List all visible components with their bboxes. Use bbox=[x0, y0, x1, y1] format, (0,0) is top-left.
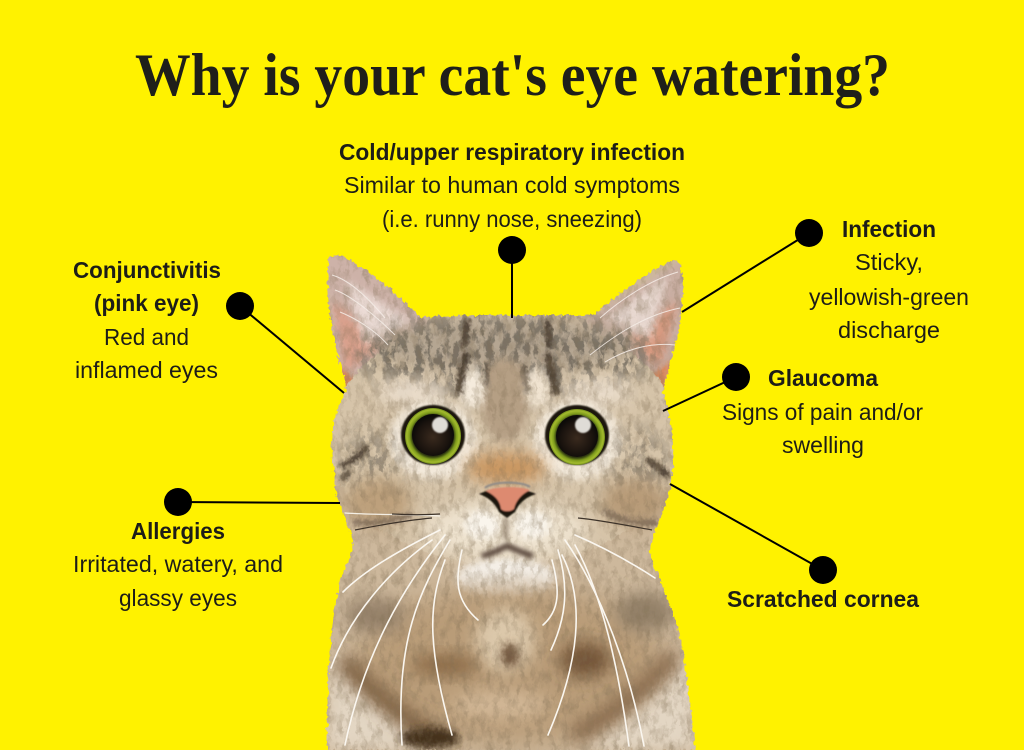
callout line and dot: glaucoma bbox=[663, 363, 750, 411]
callout line and dot: conjunctivitis bbox=[226, 292, 344, 393]
head fur bbox=[329, 313, 681, 597]
text: infection: Sticky, bbox=[855, 249, 923, 275]
callout line and dot: scratched cornea bbox=[670, 484, 837, 584]
text: glaucoma: Glaucoma bbox=[768, 365, 878, 391]
tabby stripes bbox=[342, 322, 668, 523]
text: allergies: Allergies bbox=[131, 518, 225, 544]
text: conjunctivitis: Conjunctivitis bbox=[73, 257, 221, 283]
cat photo illustration bbox=[320, 250, 700, 750]
text: infection: Infection bbox=[842, 216, 936, 242]
text: allergies: Irritated, watery, and bbox=[73, 551, 283, 577]
left eye bbox=[401, 405, 465, 465]
text: cold / upper respiratory infection: Cold/upper respiratory infection bbox=[339, 139, 685, 165]
text: glaucoma: swelling bbox=[782, 432, 864, 458]
text: scratched cornea: Scratched cornea bbox=[727, 586, 919, 612]
nose bbox=[479, 483, 536, 518]
callout line and dot: infection bbox=[682, 219, 823, 312]
text: infection: yellowish-green bbox=[809, 284, 969, 310]
text: glaucoma: Signs of pain and/or bbox=[722, 399, 923, 425]
text: conjunctivitis: inflamed eyes bbox=[75, 357, 218, 383]
ears bbox=[322, 250, 690, 398]
bottom fur backing strip bbox=[330, 725, 692, 750]
muzzle and chin bbox=[423, 500, 587, 560]
text: infection: discharge bbox=[838, 317, 940, 343]
title: Why is your cat's eye watering? bbox=[135, 42, 890, 108]
text: conjunctivitis: (pink eye) bbox=[94, 290, 199, 316]
chest fur bbox=[327, 585, 695, 750]
whiskers bbox=[331, 513, 655, 746]
text: conjunctivitis: Red and bbox=[104, 324, 189, 350]
callout line and dot: cold bbox=[498, 236, 526, 318]
right eye bbox=[545, 405, 609, 465]
text: glaucoma bbox=[722, 365, 923, 458]
text: conjunctivitis bbox=[73, 257, 221, 383]
mouth bbox=[482, 518, 533, 556]
text: cold / upper respiratory infection bbox=[339, 139, 685, 232]
ear hairs bbox=[332, 272, 680, 362]
text: cold / upper respiratory infection: (i.e. runny nose, sneezing) bbox=[382, 206, 642, 232]
callout line and dot: allergies bbox=[164, 488, 340, 516]
dark whiskers bbox=[355, 514, 652, 530]
text: allergies: glassy eyes bbox=[119, 585, 237, 611]
text: allergies bbox=[73, 518, 283, 611]
fur texture bbox=[320, 250, 700, 750]
text: infection bbox=[809, 216, 969, 343]
text: cold / upper respiratory infection: Similar to human cold symptoms bbox=[344, 172, 680, 198]
